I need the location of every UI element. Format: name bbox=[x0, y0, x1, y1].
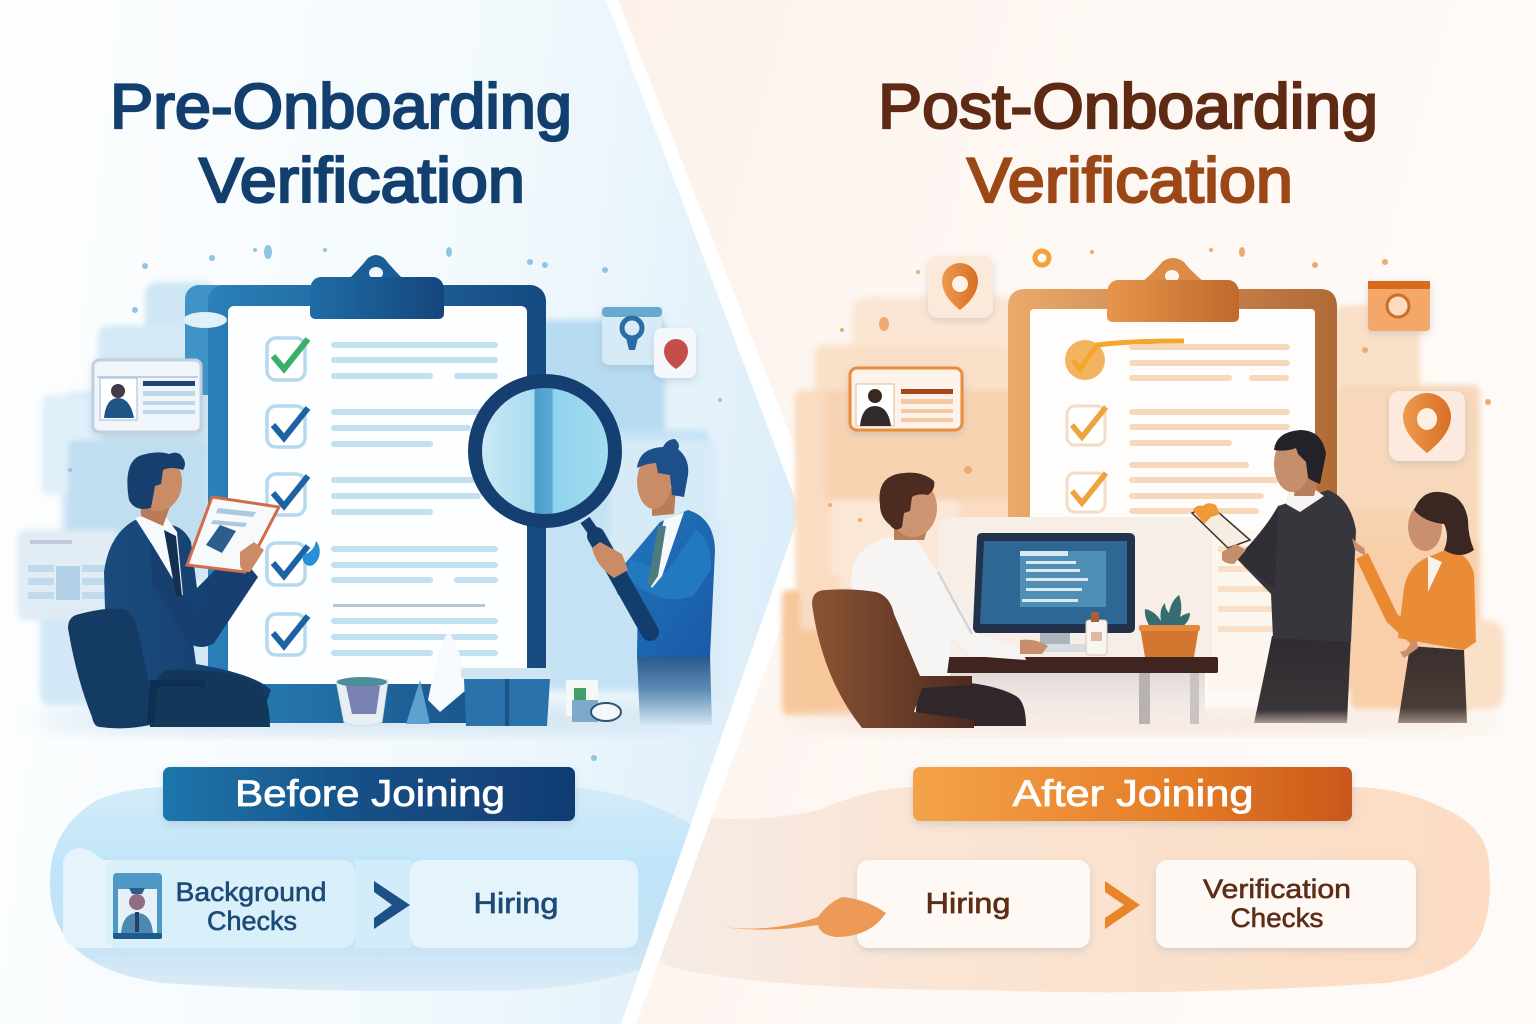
right arm bbox=[150, 540, 258, 647]
after joining button bbox=[913, 767, 1352, 821]
shirt bbox=[851, 536, 1026, 682]
card: background checks: Checks bbox=[207, 906, 297, 936]
card: hiring: Hiring bbox=[474, 888, 558, 920]
magnifying glass lens bbox=[475, 381, 615, 540]
sequence strip bbox=[63, 848, 113, 948]
clipboard clip bbox=[1107, 258, 1239, 322]
background: left panel bbox=[0, 0, 830, 1024]
card: verification checks bbox=[1156, 860, 1416, 948]
blob background bbox=[50, 787, 695, 991]
floor shadow bbox=[780, 712, 1500, 732]
clipboard clip bbox=[310, 255, 444, 319]
card: background checks: Background bbox=[176, 877, 326, 907]
after joining button: After Joining bbox=[1012, 772, 1254, 814]
neck and head bbox=[140, 490, 173, 526]
person: seated employee bbox=[812, 473, 1048, 728]
blue paint flecks bbox=[68, 245, 722, 761]
title: post-onboarding: Post-Onboarding bbox=[878, 72, 1378, 142]
orange paint flecks bbox=[828, 247, 1491, 543]
person: inspector with blue jacket bbox=[592, 439, 715, 725]
before joining button bbox=[163, 767, 575, 821]
lap bbox=[149, 670, 270, 727]
paper cup bbox=[1086, 612, 1107, 655]
arrow: chevron bbox=[374, 881, 410, 929]
title: verification right: Verification bbox=[967, 146, 1293, 216]
title: verification left: Verification bbox=[199, 146, 525, 216]
clipboard bbox=[1008, 258, 1337, 690]
connector band between cards bbox=[355, 860, 411, 948]
ring icon bbox=[1035, 251, 1049, 265]
location pin icon top bbox=[928, 256, 993, 318]
badge icon bbox=[602, 307, 662, 365]
hand bbox=[240, 542, 264, 572]
computer monitor bbox=[973, 533, 1135, 652]
magnifier handle bbox=[596, 536, 650, 632]
centre divider arrow bbox=[606, 0, 822, 1024]
person: standing man bbox=[1192, 430, 1356, 723]
shirt and tie bbox=[135, 510, 183, 596]
checklist rows bbox=[1065, 340, 1290, 514]
hand bbox=[1020, 640, 1048, 654]
location pin icon bbox=[654, 328, 696, 378]
panel: post-onboarding illustration bbox=[780, 247, 1504, 732]
clipboard bbox=[183, 255, 546, 723]
person: seated reviewer bbox=[68, 452, 279, 728]
id card bbox=[850, 368, 962, 430]
potted plant bbox=[1139, 595, 1200, 657]
photo icon bbox=[1368, 281, 1430, 331]
before joining button: Before Joining bbox=[235, 772, 505, 814]
location pin icon right bbox=[1389, 391, 1465, 461]
person: woman in orange bbox=[1352, 492, 1476, 723]
title: pre-onboarding: Pre-Onboarding bbox=[110, 72, 572, 142]
under desk shade bbox=[950, 672, 1205, 722]
checklist rows bbox=[267, 338, 498, 656]
card: hiring bbox=[857, 860, 1090, 948]
pants bbox=[915, 680, 1026, 726]
id card bbox=[93, 360, 201, 432]
orange watercolor backdrop bbox=[782, 297, 1504, 715]
swoosh arrow bbox=[722, 897, 886, 937]
tablet bbox=[1192, 505, 1250, 548]
card: verification checks: Checks bbox=[1230, 903, 1324, 933]
desk bbox=[941, 657, 1218, 724]
floor shadow bbox=[35, 708, 705, 732]
background: right panel bbox=[612, 0, 1536, 1024]
arrow: chevron bbox=[1105, 881, 1140, 929]
blob background bbox=[660, 787, 1490, 992]
panel: before joining timeline bbox=[50, 767, 695, 991]
chair bbox=[812, 589, 974, 728]
icon: profile badge bbox=[113, 873, 162, 939]
desk backdrop panel bbox=[938, 517, 1212, 667]
panel: pre-onboarding illustration bbox=[18, 245, 728, 761]
suit body bbox=[104, 520, 271, 712]
faded document left bbox=[22, 535, 107, 620]
chair bbox=[68, 609, 158, 728]
card: verification checks: Verification bbox=[1203, 874, 1351, 904]
neck and head bbox=[894, 510, 930, 540]
card: background checks bbox=[105, 860, 355, 948]
panel: after joining timeline bbox=[660, 767, 1490, 992]
desk items bbox=[336, 630, 621, 726]
tablet bbox=[187, 497, 279, 572]
blue watercolor backdrop bbox=[18, 282, 728, 705]
card: hiring bbox=[410, 860, 638, 948]
card: hiring: Hiring bbox=[926, 888, 1010, 920]
arm bbox=[626, 530, 711, 599]
